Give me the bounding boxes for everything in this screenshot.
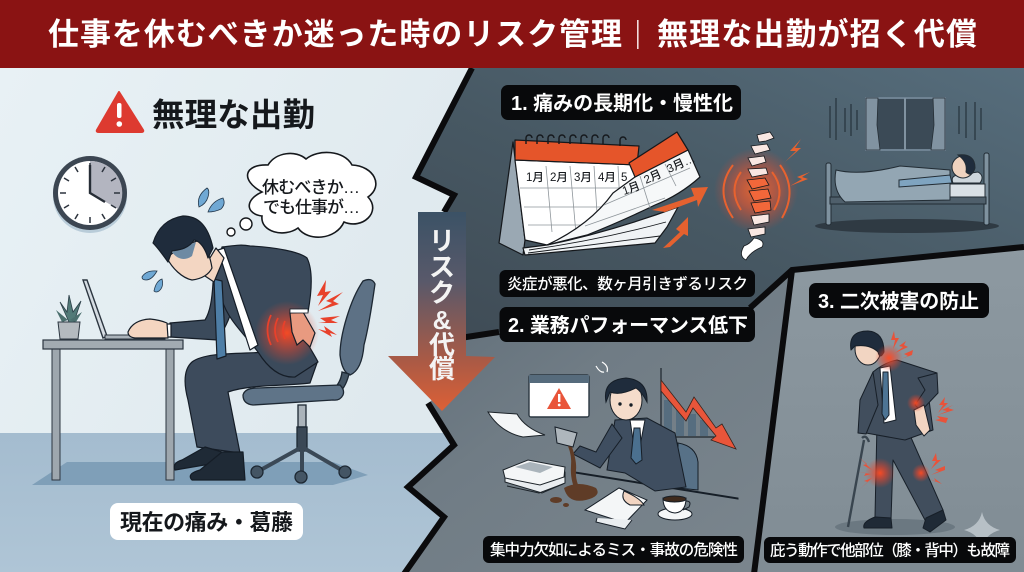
icon: pain lightning bolts xyxy=(317,280,343,337)
shoes xyxy=(174,447,222,470)
office chair xyxy=(243,280,375,483)
face xyxy=(167,241,212,280)
heading: 3. secondary damage: 3. 二次被害の防止 xyxy=(818,290,979,313)
icon: glowing spine xyxy=(714,132,810,260)
icon: lower-back pain glow xyxy=(255,301,319,365)
heading: forced attendance: 無理な出勤 xyxy=(152,97,315,133)
icon: sweat drops xyxy=(142,188,224,292)
panel: secondary damage background xyxy=(754,247,1024,572)
calendar month labels: 2月 xyxy=(642,168,664,187)
heading: 2. performance decline: 2. 業務パフォーマンス低下 xyxy=(508,314,748,337)
trousers xyxy=(185,352,317,453)
calendar month labels: 1月 xyxy=(621,179,642,198)
illustration: person lying in bed xyxy=(815,153,999,233)
thought bubble: 休むべきか… xyxy=(262,178,360,197)
title banner: 仕事を休むべきか迷った時のリスク管理 xyxy=(48,17,622,52)
illustration: man walking with cane xyxy=(835,331,955,535)
icon: browser warning window xyxy=(529,375,589,417)
shirt and tie xyxy=(218,248,258,350)
label: current pain and conflict: 現在の痛み・葛藤 xyxy=(120,510,293,535)
icon: warning triangle xyxy=(97,92,143,132)
calendar month labels: 2月 xyxy=(550,171,568,184)
calendar month labels: 4月 xyxy=(598,171,616,184)
heading: 1. chronic pain xyxy=(501,85,741,120)
heading: 1. chronic pain: 1. 痛みの長期化・慢性化 xyxy=(511,92,733,115)
calendar month labels: 1月 xyxy=(526,171,544,184)
calendar month labels: 3月 xyxy=(574,171,592,184)
arrow: risk and cost: 償 xyxy=(429,354,455,384)
calendar month labels: 3月… xyxy=(665,152,697,176)
icon: calendar with flipping pages xyxy=(499,132,700,255)
desk with laptop and plant xyxy=(32,280,368,485)
arrow: risk and cost: & xyxy=(433,305,451,335)
arrow: risk and cost: 代 xyxy=(429,330,455,360)
icon: orange rising arrows xyxy=(652,187,708,248)
illustration: businessman holding his lower back xyxy=(128,216,318,480)
calendar month labels xyxy=(526,152,697,198)
reaching arm xyxy=(170,283,233,340)
arrow: risk and cost: リ xyxy=(429,226,455,256)
caption: compensating motion: 庇う動作で他部位（膝・背中）も故障 xyxy=(770,542,1010,560)
icon: wall clock xyxy=(53,156,127,233)
arrow: risk and cost xyxy=(388,212,495,411)
icon: pain glows on neck hip and knees xyxy=(858,331,954,489)
caption: inflammation worsens xyxy=(500,270,755,297)
thought bubble xyxy=(227,152,376,237)
icon: sparkle watermark xyxy=(964,512,1000,548)
caption: compensating motion xyxy=(764,537,1016,563)
title banner xyxy=(0,0,1024,68)
panel: long-term pain background xyxy=(416,68,1024,337)
icon: coffee cup on saucer xyxy=(658,496,692,520)
caption: concentration loss xyxy=(483,536,744,563)
illustration: flying paper and document stack xyxy=(488,412,565,493)
panel: performance decline background xyxy=(406,270,792,572)
illustration: spilled coffee cup xyxy=(550,427,598,507)
zigzag panel dividers xyxy=(404,68,1024,572)
arrow: risk and cost: ク xyxy=(429,278,455,308)
neck xyxy=(205,248,224,282)
caption: inflammation worsens: 炎症が悪化、数ヶ月引きずるリスク xyxy=(507,274,748,293)
left panel: current pain background xyxy=(0,68,480,572)
illustration: window at night xyxy=(830,98,981,150)
hair xyxy=(153,216,213,262)
illustration: worker spilling coffee at desk xyxy=(573,362,738,529)
thought bubble: でも仕事が… xyxy=(263,197,360,217)
calendar month labels: 5 xyxy=(621,172,627,184)
hand on keyboard xyxy=(128,319,168,338)
jacket xyxy=(213,245,318,377)
caption: concentration loss: 集中力欠如によるミス・事故の危険性 xyxy=(490,540,738,559)
title banner: 無理な出勤が招く代償 xyxy=(657,17,977,52)
arrow: risk and cost: ス xyxy=(429,252,455,282)
heading: 3. secondary damage xyxy=(809,283,989,318)
heading: 2. performance decline xyxy=(500,307,755,342)
label: current pain and conflict xyxy=(110,503,303,540)
icon: falling chart xyxy=(661,368,736,449)
